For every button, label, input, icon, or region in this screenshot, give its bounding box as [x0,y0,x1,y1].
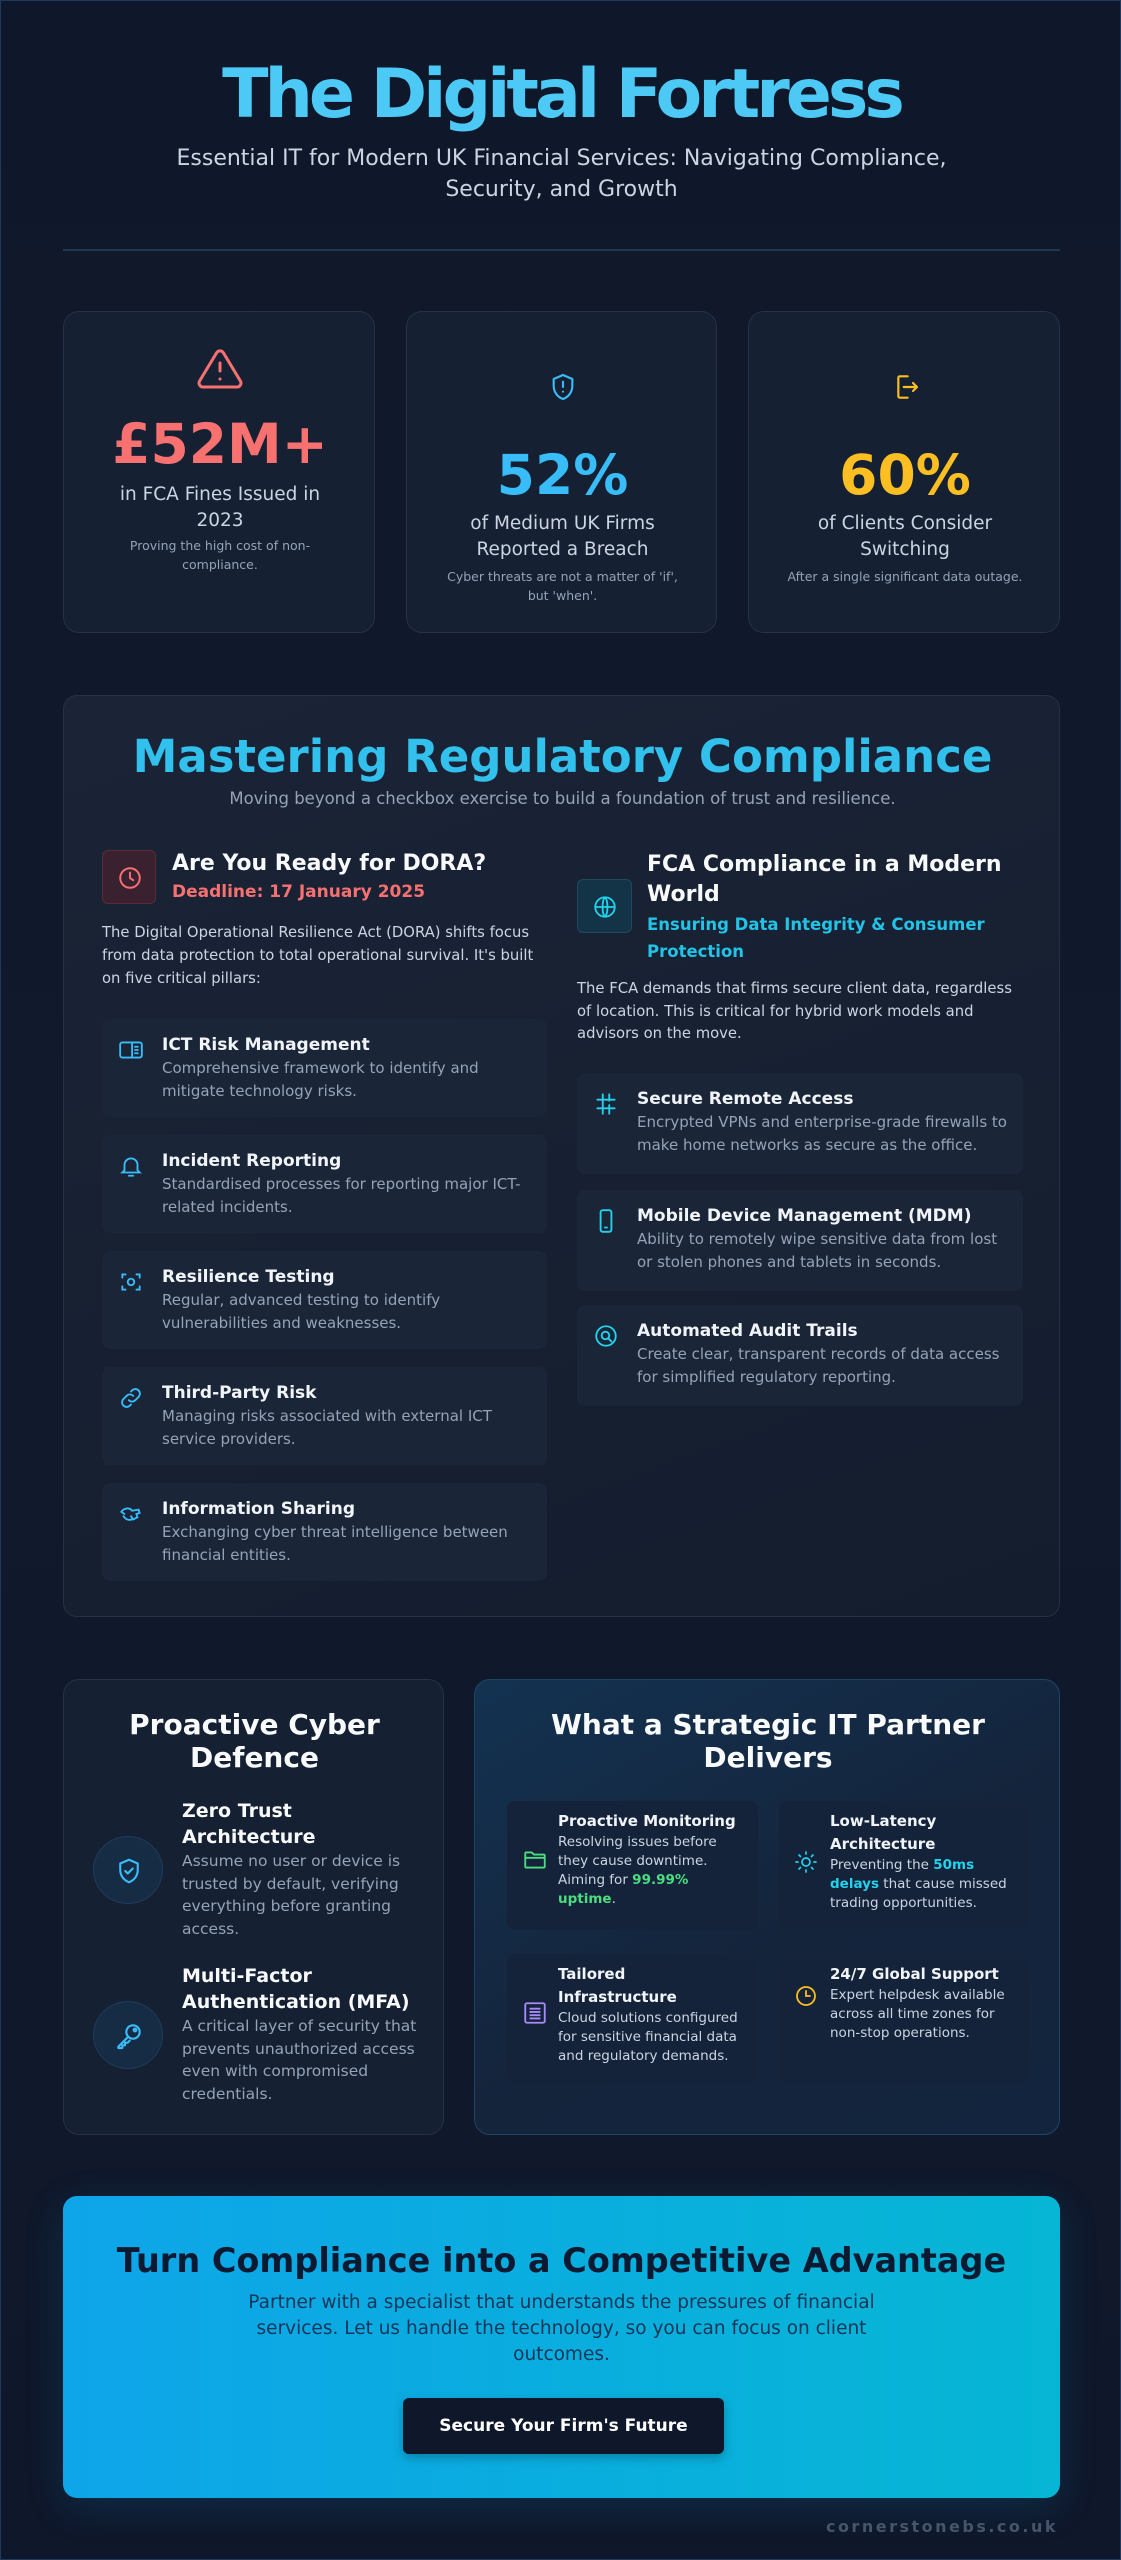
intro text [102,924,533,987]
feature: audit: for simplified regulatory reporting. [637,1368,896,1386]
note: but 'when'. [528,588,597,602]
box: support: 24/7 Global Support [830,1965,999,1983]
heading: DORA: Are You Ready for DORA? [172,851,486,876]
box: support: Expert helpdesk available [830,1987,1005,2003]
pillar: info sharing: Exchanging cyber threat intelligence between [162,1523,508,1541]
CTA heading: Turn Compliance into a Competitive Advantage [117,2241,1006,2280]
box: monitoring: Resolving issues before [558,1834,717,1850]
feature: remote access: Secure Remote Access [637,1089,853,1109]
icon: clock box [102,850,156,904]
box: support: across all time zones for [830,2006,995,2022]
value: 60% [839,443,971,507]
pillar: info sharing: financial entities. [162,1546,291,1564]
label: Reported a Breach [476,539,649,560]
pillar: ICT risk: mitigate technology risks. [162,1082,357,1100]
panel: cyber defence [63,1679,444,2135]
icon: exit [897,375,918,399]
item: MFA: credentials. [182,2084,272,2102]
tagline: Ensuring Data Integrity & Consumer [647,915,985,934]
feature: audit: Automated Audit Trails [637,1321,858,1341]
heading: Proactive Cyber [129,1708,380,1741]
intro text: on five critical pillars: [102,970,261,987]
heading [129,1708,380,1774]
note: Proving the high cost of non- [130,538,310,553]
intro text: from data protection to total operational survival. It's built [102,947,533,964]
item: zero trust: Assume no user or device is [182,1852,400,1870]
feature: MDM: Ability to remotely wipe sensitive data from lost [637,1230,997,1248]
icon: shield check [93,1836,163,1904]
box: monitoring: they cause downtime. [558,1853,708,1869]
pillar: testing: Regular, advanced testing to identify [162,1291,440,1309]
label [818,513,992,560]
item: MFA: A critical layer of security that [182,2017,416,2035]
box: latency: delays that cause missed [830,1876,1007,1892]
pillar: third party: Third-Party Risk [162,1383,316,1403]
pillar: ICT risk: ICT Risk Management [162,1035,370,1055]
pillar: incident: Standardised processes for reporting major ICT- [162,1175,521,1193]
note: Cyber threats are not a matter of 'if', [447,569,678,584]
value: £52M+ [112,412,328,476]
pillar: testing: vulnerabilities and weaknesses. [162,1314,401,1332]
item: zero trust [93,1800,400,1938]
heading: Delivers [703,1741,833,1774]
subtitle [176,146,946,202]
feature: audit: Create clear, transparent records of data access [637,1345,999,1363]
pillar: third party: service providers. [162,1430,296,1448]
box: latency: trading opportunities. [830,1895,977,1911]
box: support: non-stop operations. [830,2025,970,2041]
box: infrastructure: for sensitive financial data [558,2029,737,2045]
item: MFA: Authentication (MFA) [182,1991,410,2013]
CTA text: services. Let us handle the technology, so you can focus on client [257,2318,866,2339]
label [470,513,655,560]
intro text: advisors on the move. [577,1025,742,1042]
box: monitoring: uptime. [558,1891,616,1907]
feature: remote access: make home networks as secure as the office. [637,1136,977,1154]
label: of Medium UK Firms [470,513,655,534]
item: zero trust: everything before granting [182,1897,391,1915]
note: After a single significant data outage. [788,569,1022,584]
column: FCA [576,852,1023,1406]
feature: remote access: Encrypted VPNs and enterprise-grade firewalls to [637,1113,1007,1131]
pillar: ICT risk [102,1019,547,1117]
label: of Clients Consider [818,513,992,534]
box: infrastructure: Infrastructure [558,1988,677,2006]
box: monitoring: Aiming for 99.99% [558,1872,688,1888]
title: The Digital Fortress [222,55,901,134]
item: MFA: Multi-Factor [182,1965,312,1987]
feature: MDM [577,1190,1023,1291]
box: infrastructure: and regulatory demands. [558,2048,729,2064]
pillar: incident: related incidents. [162,1198,293,1216]
pillar: info sharing: Information Sharing [162,1499,355,1519]
box: support [779,1954,1030,2083]
item: MFA: even with compromised [182,2062,368,2080]
item: zero trust: Zero Trust [182,1800,292,1822]
pillar: info sharing [102,1483,547,1581]
item: zero trust: trusted by default, verifying [182,1874,399,1892]
pillar: incident: Incident Reporting [162,1151,341,1171]
subtitle: Essential IT for Modern UK Financial Services: Navigating Compliance, [176,146,946,171]
pillar: testing: Resilience Testing [162,1267,335,1287]
intro text [576,980,1012,1042]
item: MFA [93,1965,416,2102]
CTA button [403,2398,724,2454]
feature: MDM: Mobile Device Management (MDM) [637,1206,971,1226]
note [447,569,678,602]
panel: regulatory compliance [63,695,1060,1617]
item: zero trust: Architecture [182,1826,315,1848]
icon: globe box [577,879,632,933]
heading: Defence [190,1741,319,1774]
box: latency [779,1801,1030,1930]
icon: key [93,2001,163,2069]
subheading: Moving beyond a checkbox exercise to build a foundation of trust and resilience. [229,789,896,808]
CTA banner [63,2196,1060,2498]
intro text: The FCA demands that firms secure client data, regardless [577,980,1012,997]
CTA button: Secure Your Firm's Future [439,2416,688,2436]
icon: shield [552,374,574,400]
item: zero trust: access. [182,1920,239,1938]
heading: Mastering Regulatory Compliance [133,730,992,783]
CTA text: outcomes. [513,2344,610,2365]
column: DORA [102,850,547,1581]
stat card: breaches [406,311,717,633]
icon: warning [198,349,242,388]
note: compliance. [182,556,258,572]
value: 52% [497,443,628,507]
tagline [647,915,985,961]
pillar: testing [102,1251,547,1349]
box: infrastructure: Tailored [558,1965,625,1983]
heading: What a Strategic IT Partner [551,1708,985,1741]
stat card: switching [748,311,1060,633]
feature: audit [577,1305,1023,1406]
box: monitoring [507,1801,758,1930]
pillar: third party [102,1367,547,1465]
box: latency: Preventing the 50ms [830,1857,974,1873]
note [130,538,310,572]
label: in FCA Fines Issued in [120,484,320,505]
CTA text [248,2292,875,2365]
box: infrastructure [507,1954,758,2083]
heading [551,1708,985,1774]
CTA text: Partner with a specialist that understands the pressures of financial [248,2292,875,2313]
stat card: fines [63,311,375,633]
box: infrastructure: Cloud solutions configured [558,2010,738,2026]
heading: FCA: World [647,882,720,907]
heading: FCA [647,852,1002,907]
tagline: Protection [647,942,744,961]
item: MFA: prevents unauthorized access [182,2040,415,2058]
feature: remote access [577,1073,1023,1174]
pillar: third party: Managing risks associated with external ICT [162,1407,492,1425]
box: monitoring: Proactive Monitoring [558,1812,736,1830]
subtitle: Security, and Growth [445,177,678,202]
pillar: ICT risk: Comprehensive framework to identify and [162,1059,479,1077]
label: 2023 [196,510,244,531]
heading: FCA: FCA Compliance in a Modern [647,852,1002,877]
footer: cornerstonebs.co.uk [826,2517,1058,2536]
deadline: Deadline: 17 January 2025 [172,882,425,902]
intro text: of location. This is critical for hybrid work models and [577,1002,974,1020]
box: latency: Architecture [830,1835,935,1853]
label: Switching [860,539,950,560]
intro text: The Digital Operational Resilience Act (DORA) shifts focus [102,924,529,941]
box: latency: Low-Latency [830,1812,936,1830]
feature: MDM: or stolen phones and tablets in seconds. [637,1253,941,1271]
label [120,484,320,531]
panel: strategic partner [474,1679,1060,2135]
pillar: incident [102,1135,547,1233]
